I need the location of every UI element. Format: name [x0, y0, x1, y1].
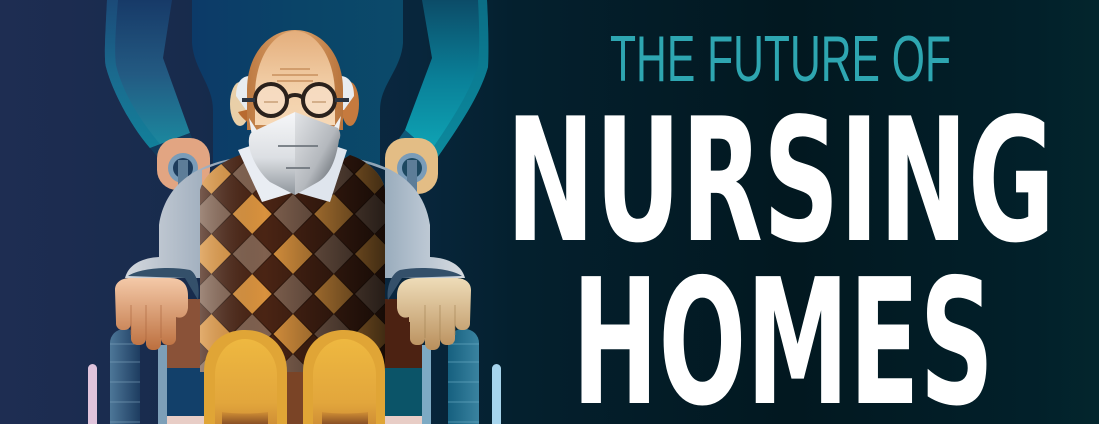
left cuff — [128, 268, 199, 300]
right wheel — [448, 329, 479, 424]
right thin bar — [492, 364, 501, 424]
nurse left arm — [105, 0, 190, 148]
left hand — [115, 278, 188, 350]
face mask — [249, 112, 341, 195]
left ear and hair — [230, 76, 254, 126]
left knee — [204, 330, 287, 424]
right cuff — [388, 268, 462, 300]
argyle vest — [200, 155, 385, 372]
glasses — [242, 84, 349, 116]
nurse torso — [192, 0, 403, 165]
right handle — [385, 130, 438, 194]
lower seat panels — [167, 368, 422, 416]
left wheel — [110, 329, 140, 424]
wheelchair — [88, 130, 501, 424]
right sleeve — [352, 158, 465, 278]
nurse behind the wheelchair — [105, 0, 488, 165]
elderly man — [115, 30, 471, 424]
left handle — [150, 133, 210, 192]
frame uprights — [158, 345, 431, 424]
left sleeve — [125, 158, 235, 278]
right hand — [397, 278, 471, 350]
footrest — [167, 416, 422, 424]
right ear and hair — [336, 76, 359, 126]
head — [247, 30, 343, 130]
seat sides — [167, 299, 422, 368]
center seat — [287, 372, 303, 424]
shirt collar — [238, 146, 347, 202]
nurse right arm — [405, 0, 488, 158]
left thin bar — [88, 364, 97, 424]
right knee — [303, 330, 385, 424]
